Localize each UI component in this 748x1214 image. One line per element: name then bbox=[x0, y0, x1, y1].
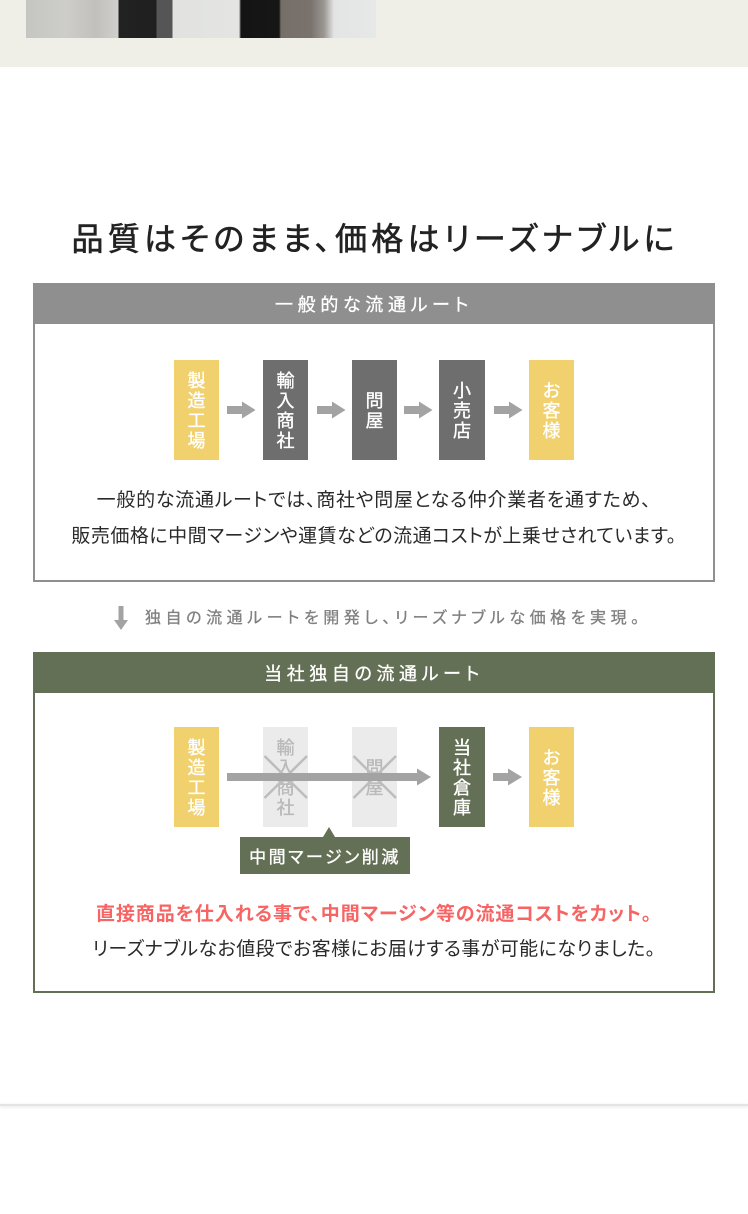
step: factory: 製 bbox=[188, 738, 206, 758]
text: transition statement: 独自の流通ルートを開発し、リーズナブルな価格を実現。 bbox=[145, 610, 644, 627]
step: wholesaler removed bbox=[352, 727, 397, 827]
step: factory: 造 bbox=[188, 758, 206, 778]
step: factory: 工 bbox=[188, 410, 206, 430]
top beige band with photo crop bbox=[0, 0, 748, 67]
panel: general distribution route bbox=[33, 283, 715, 582]
step: importer: 入 bbox=[276, 390, 294, 410]
step: own warehouse: 社 bbox=[453, 758, 471, 778]
step: own warehouse: 庫 bbox=[453, 798, 471, 818]
arrow bbox=[493, 768, 522, 786]
step: factory bbox=[174, 360, 219, 460]
step: factory: 場 bbox=[188, 798, 206, 818]
step: factory bbox=[174, 727, 219, 827]
step: importer removed: 輸 bbox=[276, 738, 294, 758]
step: wholesaler bbox=[352, 360, 397, 460]
step: importer removed: 商 bbox=[276, 778, 294, 798]
section bottom edge bbox=[0, 1104, 748, 1106]
step: importer: 社 bbox=[276, 430, 294, 450]
step: factory: 製 bbox=[188, 370, 206, 390]
arrow bbox=[404, 402, 432, 418]
step: own warehouse: 当 bbox=[453, 738, 471, 758]
step: wholesaler: 屋 bbox=[366, 410, 384, 430]
text: general route description: 一般的な流通ルートでは、商社や問屋となる仲介業者を通すため、 bbox=[97, 490, 651, 511]
callout: margin reduction bbox=[240, 827, 410, 874]
step: wholesaler removed: 問 bbox=[366, 758, 384, 778]
step: retailer: 小 bbox=[453, 380, 471, 400]
callout pointer bbox=[323, 827, 335, 837]
arrow bbox=[317, 402, 346, 418]
step: importer: 商 bbox=[276, 410, 294, 430]
arrow: direct route bbox=[227, 768, 431, 786]
panel heading: 一般的な流通ルート bbox=[275, 295, 473, 315]
step: customer: 客 bbox=[542, 768, 560, 788]
step: importer bbox=[263, 360, 308, 460]
step: retailer: 売 bbox=[453, 400, 471, 420]
arrow bbox=[494, 402, 522, 418]
panel: own distribution route bbox=[33, 652, 715, 993]
arrow bbox=[227, 402, 256, 418]
step: customer: 様 bbox=[542, 788, 560, 808]
step: factory: 工 bbox=[188, 778, 206, 798]
step: own warehouse: 倉 bbox=[453, 778, 471, 798]
step: factory: 造 bbox=[188, 390, 206, 410]
step: customer: 様 bbox=[542, 420, 560, 440]
step: importer removed: 社 bbox=[276, 798, 294, 818]
panel heading: 当社独自の流通ルート bbox=[264, 664, 484, 684]
step: factory: 場 bbox=[188, 430, 206, 450]
step: retailer: 店 bbox=[453, 420, 471, 440]
panel heading bbox=[33, 652, 715, 693]
step: wholesaler: 問 bbox=[366, 390, 384, 410]
step: customer: お bbox=[542, 748, 560, 768]
panel heading bbox=[33, 283, 715, 324]
step: retailer bbox=[439, 360, 485, 460]
step: customer: お bbox=[542, 380, 560, 400]
step: customer: 客 bbox=[542, 400, 560, 420]
text: own route description: リーズナブルなお値段でお客様にお届けする事が可能になりました。 bbox=[92, 939, 656, 960]
callout label bbox=[240, 837, 410, 874]
step: wholesaler removed: 屋 bbox=[366, 778, 384, 798]
callout label: 中間マージン削減 bbox=[249, 848, 401, 867]
step: customer bbox=[529, 360, 574, 460]
step: importer removed: 入 bbox=[276, 758, 294, 778]
title: 品質はそのまま、価格はリーズナブルに bbox=[71, 221, 679, 257]
step: importer removed bbox=[263, 727, 308, 827]
photo crop bbox=[26, 0, 376, 38]
icon: down arrow bbox=[114, 606, 128, 630]
step: importer: 輸 bbox=[276, 370, 294, 390]
text: general route description: 販売価格に中間マージンや運賃などの流通コストが上乗せされています。 bbox=[71, 526, 677, 547]
step: customer bbox=[529, 727, 574, 827]
icon: cross marks bbox=[264, 755, 397, 799]
text: general route description bbox=[71, 490, 677, 547]
text: red highlight: 直接商品を仕入れる事で、中間マージン等の流通コストをカット。 bbox=[96, 904, 652, 925]
step: own warehouse bbox=[439, 727, 485, 827]
